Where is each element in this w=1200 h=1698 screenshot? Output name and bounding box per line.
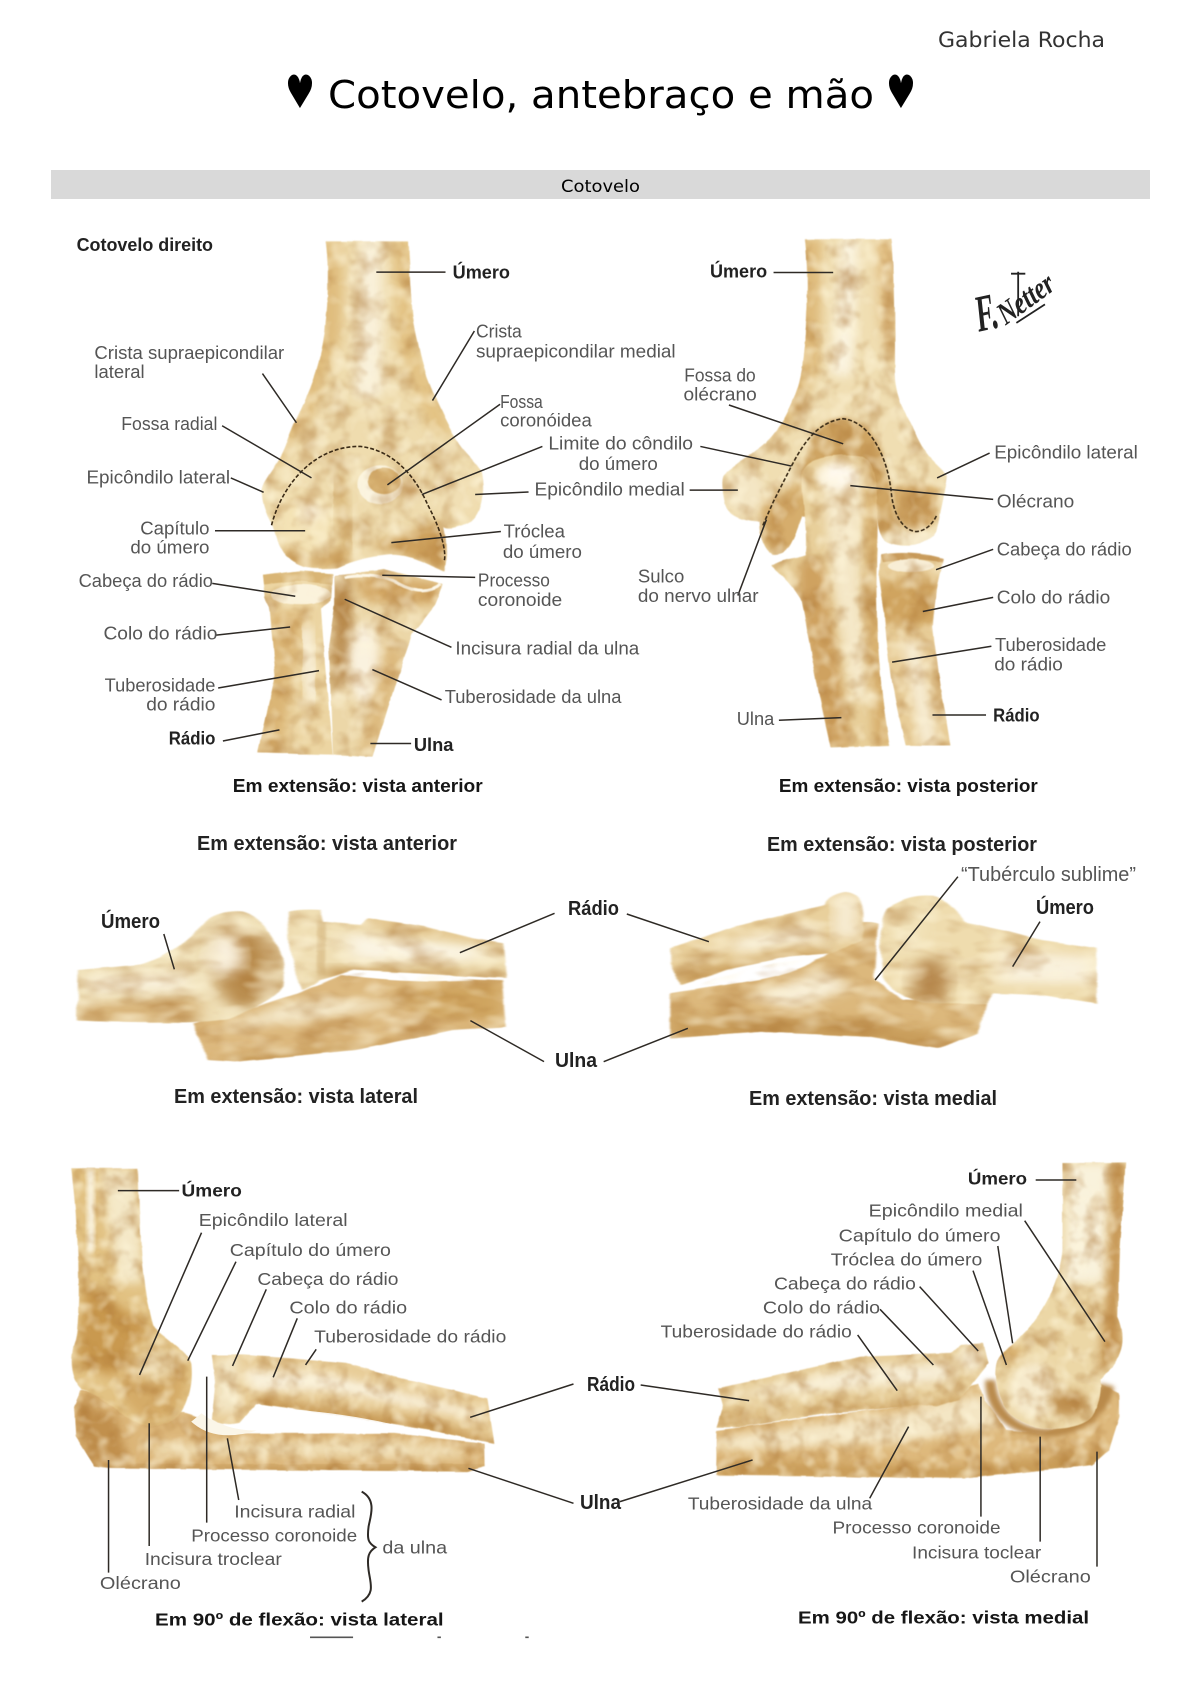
labels: Cabeça do rádio	[997, 539, 1132, 560]
bone: ulna posterior	[772, 455, 891, 747]
bone: radius anterior	[254, 571, 335, 755]
dashed line: condyle limit	[272, 446, 445, 560]
captions row: anterior and posterior: Em extensão: vista anterior	[197, 833, 457, 855]
bone: radius flexion medial	[716, 1343, 989, 1427]
labels: Cotovelo direito	[77, 236, 213, 256]
labels: Processo coronoide	[191, 1525, 357, 1546]
labels: Epicôndilo lateral	[199, 1209, 348, 1230]
bone: humerus flexion lateral	[71, 1168, 192, 1425]
leader lines	[212, 272, 542, 744]
labels: Em extensão: vista posterior	[779, 776, 1038, 796]
brace: da ulna	[362, 1492, 375, 1602]
labels: Tuberosidade	[105, 676, 215, 697]
center labels: flexion views	[580, 1374, 635, 1514]
labels: “Tubérculo sublime”	[961, 864, 1136, 886]
labels: coronoide	[478, 590, 562, 611]
labels: Rádio	[169, 729, 215, 749]
labels: Epicôndilo medial	[869, 1200, 1023, 1221]
center labels: flexion views: Ulna	[580, 1492, 622, 1514]
labels: Tuberosidade da ulna	[445, 687, 622, 708]
labels: Tuberosidade do rádio	[314, 1326, 506, 1346]
labels: Úmero	[1036, 895, 1094, 919]
bone: radius medial	[670, 893, 863, 988]
labels: da ulna	[382, 1537, 448, 1557]
labels: Ulna	[414, 735, 454, 756]
labels: Limite do côndilo	[548, 434, 693, 454]
captions row: anterior and posterior: Em extensão: vista posterior	[767, 834, 1037, 856]
labels: Rádio	[993, 705, 1040, 725]
labels: Tuberosidade do rádio	[661, 1321, 852, 1342]
title: ♥	[285, 65, 315, 119]
labels: Olécrano	[1010, 1566, 1091, 1586]
gap between forearm bones	[341, 960, 818, 986]
labels: do úmero	[579, 455, 658, 475]
labels: supraepicondilar medial	[476, 342, 676, 362]
labels: Olécrano	[997, 491, 1074, 512]
bone: humerus medial	[880, 896, 1097, 1003]
labels: Colo do rádio	[763, 1297, 880, 1317]
labels: Tróclea do úmero	[831, 1249, 982, 1270]
labels	[638, 260, 1138, 796]
labels: Ulna	[555, 1050, 598, 1072]
dashed line: condyle limit	[763, 419, 937, 532]
labels: Úmero	[101, 909, 160, 933]
bone: radius flexion lateral	[212, 1355, 494, 1447]
labels: Tuberosidade da ulna	[688, 1493, 873, 1513]
labels: Em extensão: vista anterior	[233, 777, 483, 797]
labels: Incisura troclear	[145, 1548, 282, 1569]
panel: posterior view of the elbow	[638, 238, 1138, 796]
labels: do rádio	[994, 654, 1063, 675]
panel: lateral and medial views in extension	[78, 864, 1136, 1110]
section header: Cotovelo	[51, 170, 1150, 199]
labels: Cabeça do rádio	[79, 572, 213, 592]
title: ♥	[886, 65, 916, 119]
panel: 90 degree flexion, medial view	[620, 1163, 1126, 1627]
labels: Incisura radial da ulna	[455, 639, 640, 660]
labels	[77, 236, 693, 797]
labels: coronóidea	[500, 411, 592, 431]
labels: lateral	[94, 363, 145, 383]
labels: Fossa radial	[121, 414, 217, 435]
labels: Fossa	[500, 392, 543, 413]
bone: ulna lateral	[193, 975, 505, 1067]
labels: Incisura toclear	[912, 1542, 1041, 1562]
labels: Úmero	[182, 1180, 242, 1201]
labels: Úmero	[968, 1168, 1027, 1188]
bone: crescent ring of trochlear notch	[985, 1380, 1114, 1437]
author name: Gabriela Rocha	[938, 28, 1105, 52]
labels: Em 90º de flexão: vista medial	[798, 1607, 1089, 1627]
labels: Em extensão: vista lateral	[174, 1086, 418, 1108]
labels: Cabeça do rádio	[774, 1273, 916, 1293]
bone: ulna anterior	[329, 570, 444, 756]
center labels: flexion views: Rádio	[587, 1374, 635, 1396]
labels: Crista supraepicondilar	[94, 344, 285, 364]
labels: Crista	[476, 322, 522, 342]
leader lines	[690, 273, 993, 720]
cropped text remnants	[310, 1635, 529, 1640]
bones: extension lateral and medial	[78, 893, 1097, 1067]
labels: Incisura radial	[234, 1501, 355, 1521]
labels: Capítulo do úmero	[839, 1225, 1001, 1246]
labels: Colo do rádio	[997, 587, 1110, 607]
title: Cotovelo, antebraço e mão	[328, 73, 874, 117]
labels: Processo	[478, 571, 550, 591]
bone: humerus lateral	[78, 911, 284, 1023]
labels: Fossa do	[684, 365, 756, 386]
labels	[661, 1168, 1091, 1627]
labels: Olécrano	[100, 1572, 181, 1593]
labels: Epicôndilo medial	[534, 480, 685, 500]
labels: Úmero	[453, 262, 510, 283]
bone: ulna flexion lateral	[74, 1390, 485, 1475]
leader lines	[164, 877, 1040, 1062]
section header: Cotovelo: Cotovelo	[561, 177, 640, 197]
bone: humerus anterior	[262, 238, 483, 575]
labels: Úmero	[710, 260, 767, 281]
signature: F. Netter: Netter	[989, 265, 1061, 332]
labels: Rádio	[568, 898, 619, 920]
captions row: anterior and posterior	[197, 833, 1037, 856]
labels: Ulna	[737, 709, 775, 729]
labels: do nervo ulnar	[638, 586, 759, 606]
bone: ulna medial	[670, 922, 986, 1050]
labels	[101, 864, 1136, 1110]
labels: Processo coronoide	[832, 1517, 1001, 1537]
labels: Capítulo	[140, 519, 209, 539]
labels: Cabeça do rádio	[257, 1268, 399, 1289]
bone: humerus posterior	[722, 238, 947, 555]
leader lines	[109, 1191, 573, 1573]
labels: do úmero	[503, 542, 582, 563]
labels: Sulco	[638, 566, 684, 587]
labels: Em 90º de flexão: vista lateral	[155, 1609, 444, 1629]
signature: F. Netter: F.	[969, 283, 1003, 344]
labels: Epicôndilo lateral	[86, 468, 230, 488]
labels: Tuberosidade	[995, 635, 1106, 655]
labels	[100, 1180, 506, 1629]
labels: Colo do rádio	[103, 624, 217, 644]
labels: Capítulo do úmero	[230, 1239, 391, 1260]
labels: Epicôndilo lateral	[994, 442, 1138, 463]
labels: olécrano	[684, 384, 757, 405]
bone: radius posterior	[877, 551, 950, 745]
leader lines	[620, 1180, 1105, 1567]
labels: do rádio	[146, 695, 215, 715]
bone: humerus flexion medial	[995, 1163, 1126, 1429]
labels: do úmero	[130, 538, 209, 559]
labels: Tróclea	[504, 522, 565, 542]
white notch ring and gap	[191, 1413, 257, 1435]
title	[285, 65, 916, 119]
bone: radius lateral	[288, 909, 509, 990]
labels: Colo do rádio	[289, 1297, 407, 1317]
panel: anterior view of the elbow	[77, 236, 693, 797]
bone: ulna flexion medial	[716, 1383, 1119, 1480]
labels: Em extensão: vista medial	[749, 1088, 997, 1110]
panel: 90 degree flexion, lateral view	[71, 1168, 573, 1637]
signature: F. Netter	[969, 265, 1061, 344]
